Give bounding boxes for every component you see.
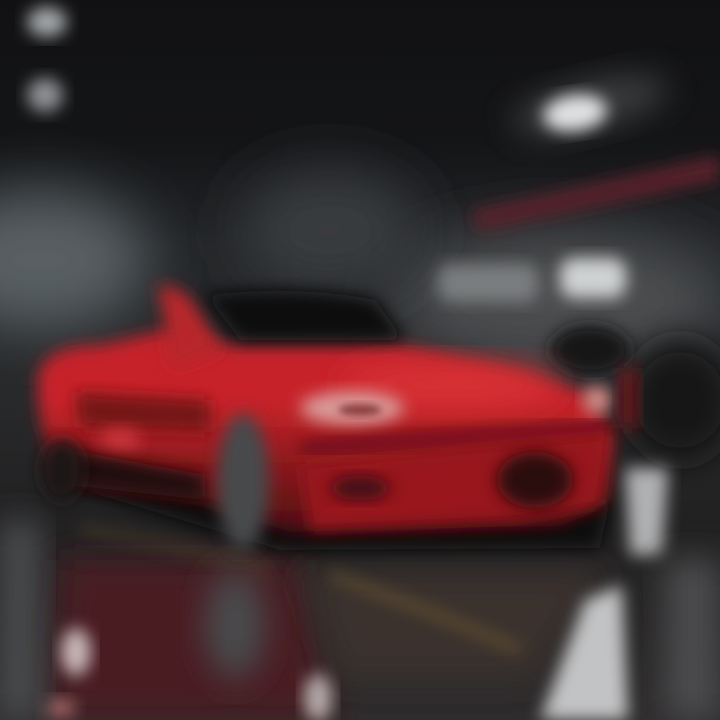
background bright windows: [438, 258, 626, 302]
windshield: [205, 291, 405, 340]
rear wheel: [40, 438, 84, 502]
right taillight glow: [618, 368, 638, 428]
side panel detail: [75, 392, 210, 432]
car shadow: [50, 470, 610, 550]
red ceiling beam: [470, 155, 720, 230]
car: [38, 285, 638, 550]
floor reflections: [0, 468, 720, 720]
front wheel: [217, 414, 269, 550]
hood highlight: [340, 363, 560, 407]
ceiling lights: [27, 7, 673, 148]
headlight: [300, 391, 404, 425]
raised door / spoiler: [158, 285, 222, 370]
background haze: [0, 170, 720, 460]
car body: [38, 330, 612, 532]
front grille: [300, 435, 610, 530]
